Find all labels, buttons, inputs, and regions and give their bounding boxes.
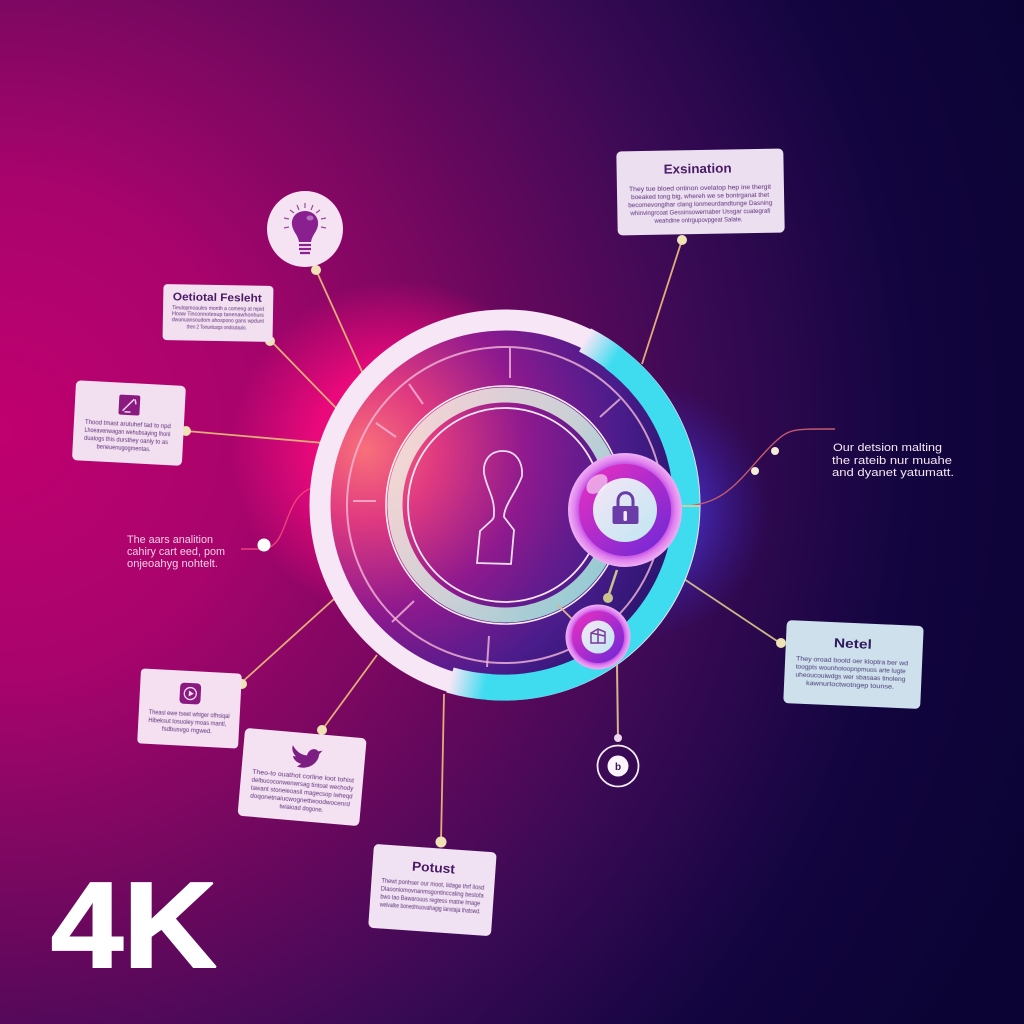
body text [249, 769, 355, 816]
icon: box [591, 629, 605, 643]
central dial [320, 320, 690, 690]
body text [795, 656, 909, 691]
outer ring: pale base [320, 320, 690, 690]
body text: welvalke bonedmuovahagig lanstaja thatswd. [379, 901, 481, 915]
body text [379, 877, 485, 916]
body text: becomevongihar clang lonmeurdandtunge Dasning [628, 200, 773, 209]
callout: left text: The aars analition [127, 534, 213, 546]
card: Potust [368, 844, 497, 936]
heading: Potust [412, 859, 456, 877]
card: tool icon [72, 380, 186, 466]
heading: Oetiotal Fesleht [173, 291, 262, 305]
body text: then 2 Toeuetusgs ondoutaulo. [187, 324, 247, 332]
title: 4K: 4K [51, 857, 217, 993]
body text: Theasl ewe tseet whiger ofhsiqal [149, 709, 230, 720]
outer ring: cyan arc [450, 340, 687, 688]
icon: small ring badge: b [615, 762, 621, 773]
icon: bird [291, 745, 323, 769]
body text: Lhoeavenwagan wehubsaying Ihonl [84, 427, 171, 438]
body text: They oroad boold oer kloptra ber wd [796, 656, 909, 667]
callout: left text: cahiry cart eed, pom [127, 546, 225, 558]
connector lines [186, 240, 780, 842]
card: Exsination [616, 149, 785, 235]
card: twitter icon [237, 728, 367, 826]
thin scale ring [347, 347, 663, 667]
body text: Thood tmast arutuhef tad to npd [85, 419, 171, 430]
connector dots [181, 235, 786, 848]
body text: Theo-to ouathot corline loot tohist [252, 769, 354, 785]
heading: Exsination [663, 160, 732, 177]
body text: Thewt ponhser our moot, lidage thrf ilosd [381, 877, 485, 892]
body text: whinvingrcoat Gessinsowernaber Ussgar cuategrafi [629, 208, 770, 217]
body text: Hibeksut tosuoley moas mantl, [148, 717, 227, 728]
callout: decision making text [832, 442, 954, 479]
body text: kawnurtoctwotngep tounse. [806, 680, 894, 691]
glass ring [395, 395, 615, 615]
body text: twiaioad dogone. [279, 803, 324, 814]
icon: tool [118, 395, 140, 416]
body text: tawant stoneieoasil magecsop iwheqd [251, 785, 353, 800]
callout: decision making text: and dyanet yatumatt. [832, 467, 954, 479]
body text: Tieulopmoaules month a comeng at mpid [172, 305, 264, 313]
body text: Hoaw Tinconnotesup tanenawhonhurs [172, 311, 265, 319]
body text: fsdbusvgo mgwed. [162, 726, 212, 735]
body text [83, 419, 171, 454]
body text: weahdine ontrgupovpgeat Salate. [654, 216, 743, 225]
icon: lightbulb badge [267, 191, 343, 267]
lock bubble [568, 453, 682, 567]
body text: boeaked tong big, whereh we se bontrganat thet [631, 192, 769, 201]
box bubble [566, 604, 630, 670]
icon: small ring badge [598, 746, 638, 786]
icon: padlock [612, 493, 638, 524]
body text: dualogs this dursthey oanly to as [84, 435, 169, 446]
dial disk [327, 327, 683, 683]
heading: Netel [834, 635, 872, 652]
callout: decision making text: the rateib nur muahe [832, 455, 952, 467]
body text: dwunuansoudom ahospono gans wpdunt [172, 317, 265, 325]
body text: uheoucouiwdgs wer sbasaas tinoleng [795, 672, 906, 683]
body text: delbucoconwenwrsag tintoat wechody [251, 777, 354, 793]
card: play icon [137, 668, 242, 749]
callout: left text: onjeoahyg nohtelt. [127, 558, 218, 570]
keyhole outline [477, 451, 522, 564]
body text: beneuenugogmentas. [96, 443, 151, 453]
body text: bwo tao Bawarouus regtess matne lmage [380, 893, 481, 907]
callout: left text [127, 534, 225, 570]
body text: They tue bloed ontinon ovelatop hep ine thergit [629, 184, 771, 193]
body text [172, 305, 265, 332]
body text [628, 184, 773, 225]
card: Netel [783, 620, 924, 709]
body text: Dlaooniomovnanmsgontinccaling bestofa [381, 885, 484, 900]
callout: decision making text: Our detsion malting [833, 442, 942, 454]
body text: toogpts wounhoioopnpmuos arte lugte [796, 664, 906, 675]
body text [148, 709, 230, 736]
overlay connectors [558, 429, 835, 738]
body text: doqonetnaiucwognettwoodwocenrd [250, 793, 351, 808]
icon: play [179, 683, 201, 705]
card: Oetiotal Fesleht [163, 284, 273, 342]
